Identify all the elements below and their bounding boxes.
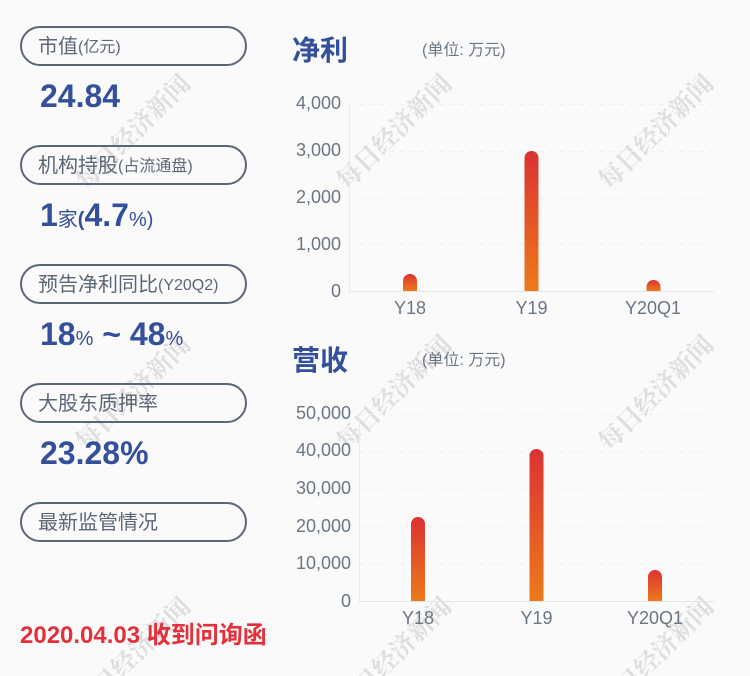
- panel: market cap label: 市值(亿元): [38, 36, 121, 58]
- market cap value: 24.84: [40, 78, 120, 114]
- panel: institutional holdings label: [20, 145, 247, 185]
- bar chart: revenue: Y20Q1: [627, 608, 683, 628]
- bar chart: net profit: Y18: [394, 298, 426, 318]
- pledge value: 23.28%: [40, 435, 149, 471]
- panel: profit forecast label: [20, 264, 247, 304]
- bar chart: net profit: 4,000: [296, 93, 341, 113]
- watermark layer: 每日经济新闻: [66, 65, 198, 197]
- heading: revenue: 营收: [292, 345, 348, 376]
- unit note: net profit: (单位: 万元): [422, 42, 506, 59]
- unit note: revenue: (单位: 万元): [422, 352, 506, 369]
- institutional holdings value: 1家(4.7%): [40, 197, 153, 233]
- bar chart: net profit: 0: [331, 281, 341, 301]
- bar chart: net profit: 1,000: [296, 234, 341, 254]
- bar chart: net profit: 3,000: [296, 140, 341, 160]
- watermark layer: 每日经济新闻: [327, 65, 459, 197]
- profit forecast value: 18% ~ 48%: [40, 316, 183, 352]
- panel: market cap label: [20, 26, 247, 66]
- watermark layer: 每日经济新闻: [589, 326, 721, 458]
- watermark layer: 每日经济新闻: [589, 65, 721, 197]
- bar chart: revenue: 50,000: [296, 403, 351, 423]
- bar chart: net profit: [296, 93, 714, 318]
- bar chart: net profit: Y19: [515, 298, 548, 318]
- bar chart: revenue: 10,000: [296, 553, 351, 573]
- bar chart: net profit: Y20Q1: [625, 298, 681, 318]
- bar chart: revenue: 0: [341, 591, 351, 611]
- bar chart: revenue: 30,000: [296, 478, 351, 498]
- watermark layer: 每日经济新闻: [327, 326, 459, 458]
- bar chart: revenue: Y18: [402, 608, 434, 628]
- panel: profit forecast label: 预告净利同比(Y20Q2): [38, 274, 218, 296]
- bar chart: net profit: 2,000: [296, 187, 341, 207]
- bar chart: revenue: [296, 403, 715, 628]
- heading: net profit: 净利: [292, 35, 348, 66]
- regulation event text: 2020.04.03 收到问询函: [20, 622, 267, 649]
- watermark layer: 每日经济新闻: [66, 326, 198, 458]
- panel: regulation label: 最新监管情况: [38, 512, 158, 534]
- bar chart: revenue: 40,000: [296, 440, 351, 460]
- panel: institutional holdings label: 机构持股(占流通盘): [38, 155, 193, 177]
- panel: regulation label: [20, 502, 247, 542]
- panel: pledge label: 大股东质押率: [38, 393, 158, 415]
- panel: pledge label: [20, 383, 247, 423]
- bar chart: revenue: Y19: [520, 608, 553, 628]
- bar chart: revenue: 20,000: [296, 516, 351, 536]
